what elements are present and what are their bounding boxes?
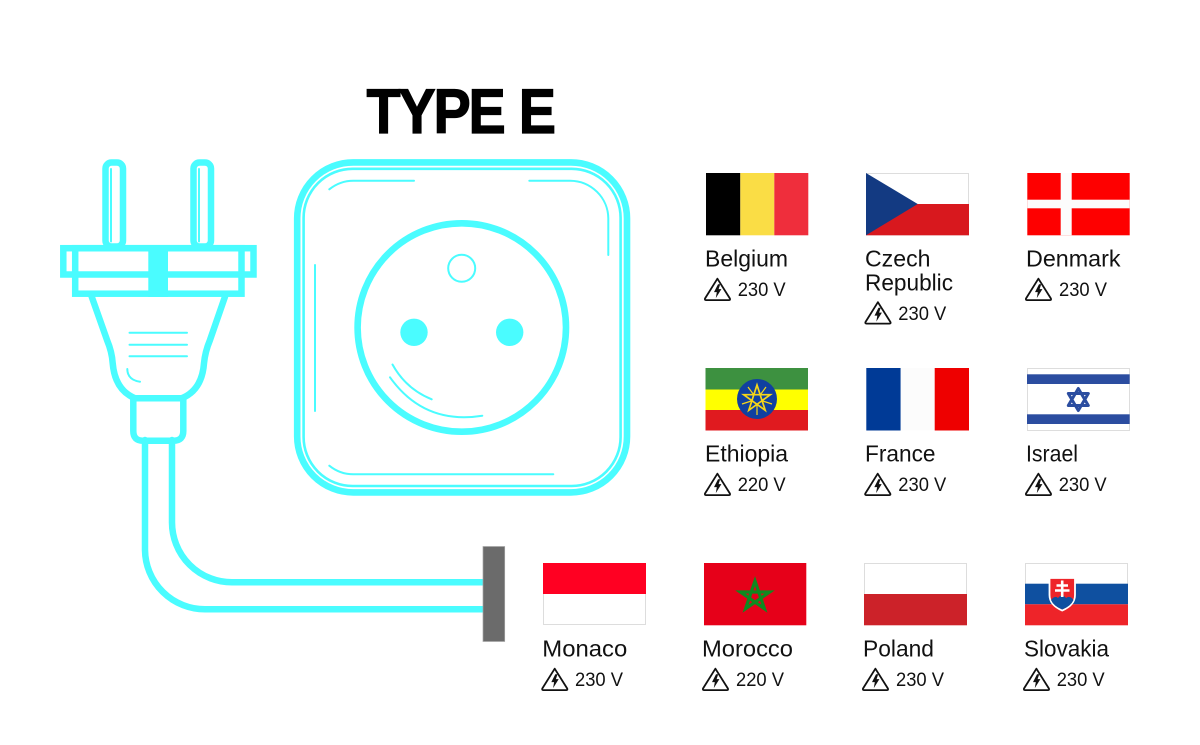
plug collar: [63, 245, 253, 297]
face highlights: [390, 364, 482, 417]
label: Belgium: Belgium: [705, 246, 788, 272]
earth pin: [448, 255, 475, 282]
label: Poland: 230 V: [896, 669, 944, 691]
flag: Monaco: [543, 563, 646, 624]
label: Monaco: [542, 636, 627, 691]
label: France: 230 V: [898, 474, 946, 496]
label: Denmark: 230 V: [1059, 279, 1107, 301]
label: Denmark: Denmark: [1026, 246, 1121, 272]
flag: Belgium: [706, 173, 808, 235]
label: Ethiopia: [705, 441, 788, 496]
socket frame: [297, 162, 627, 492]
label: Czech Republic: [865, 246, 953, 325]
cable: [145, 440, 484, 609]
plug pins: [106, 162, 211, 246]
socket holes: [400, 319, 523, 346]
label: Morocco: Morocco: [702, 636, 793, 662]
plug body: [92, 297, 225, 398]
label: Poland: Poland: [863, 636, 934, 662]
flag: Israel: [1027, 368, 1130, 430]
label: Monaco: Monaco: [542, 636, 627, 662]
label: Israel: Israel: [1026, 441, 1078, 467]
label: Israel: 230 V: [1059, 474, 1107, 496]
flag: France: [866, 368, 969, 430]
flag: Morocco: [704, 563, 806, 625]
label: Monaco: 230 V: [575, 669, 623, 691]
flag: Poland: [864, 564, 967, 625]
label: Belgium: 230 V: [738, 279, 786, 301]
flag: Ethiopia: [706, 368, 808, 430]
icon: plug with cable: [63, 162, 505, 642]
flag: Czech Republic: [866, 173, 969, 235]
label: Poland: [863, 636, 944, 691]
label: Denmark: [1026, 246, 1121, 301]
title: TYPE E: [366, 76, 554, 147]
label: Slovakia: [1024, 636, 1109, 691]
label: Israel: [1026, 441, 1107, 496]
icon: socket: [297, 162, 627, 492]
label: Czech Republic: Czech: [865, 246, 930, 272]
label: Slovakia: Slovakia: [1024, 636, 1109, 662]
plug detail lines: [127, 333, 187, 382]
label: Czech Republic: Republic: [865, 270, 953, 296]
cable end block: [483, 546, 505, 642]
socket face: [358, 223, 566, 432]
label: Belgium: [705, 246, 788, 301]
label: Czech Republic: 230 V: [898, 303, 946, 325]
label: France: [865, 441, 946, 496]
label: France: France: [865, 441, 936, 467]
label: Slovakia: 230 V: [1057, 669, 1105, 691]
socket highlights: [315, 181, 608, 474]
label: Ethiopia: 220 V: [738, 474, 786, 496]
flag: Denmark: [1027, 173, 1130, 235]
label: Morocco: [702, 636, 793, 691]
plug neck: [133, 398, 183, 441]
label: Morocco: 220 V: [736, 669, 784, 691]
label: Ethiopia: Ethiopia: [705, 441, 788, 467]
flag: Slovakia: [1025, 564, 1128, 625]
